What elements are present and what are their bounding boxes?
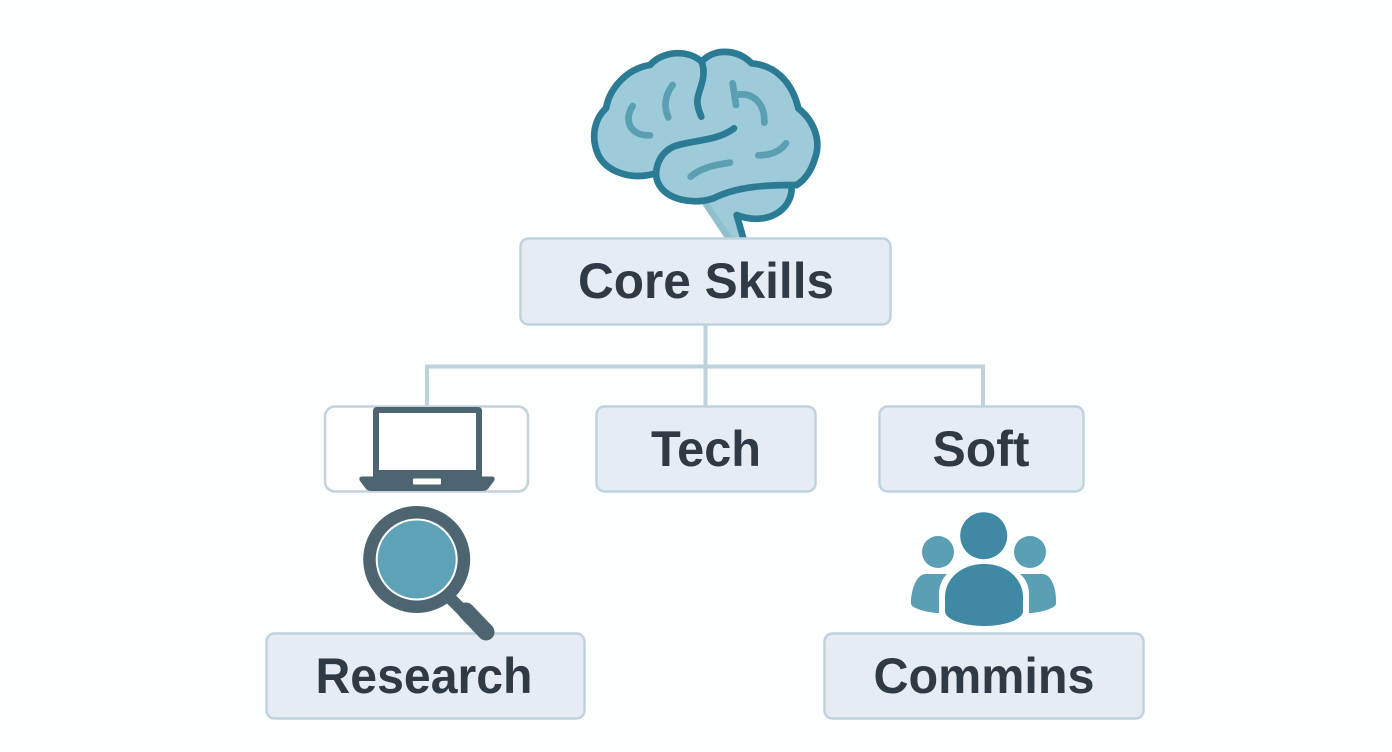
box: Core Skills: Core Skills <box>578 253 834 309</box>
box: laptop outline <box>325 406 528 492</box>
box: Commins <box>824 634 1144 718</box>
icon: brain <box>594 52 817 238</box>
box: Soft <box>880 406 1084 492</box>
box: Research <box>266 634 584 718</box>
box: Core Skills <box>520 238 890 324</box>
box: Soft: Soft <box>932 421 1030 477</box>
box: Research: Research <box>316 648 532 704</box>
box: Commins: Commins <box>874 648 1094 704</box>
icon: people group <box>911 512 1056 626</box>
box: Tech: Tech <box>651 421 761 477</box>
icon: laptop <box>359 407 495 491</box>
box: Tech <box>596 406 816 492</box>
connector lines <box>427 325 983 406</box>
icon: magnifying glass <box>363 506 486 632</box>
